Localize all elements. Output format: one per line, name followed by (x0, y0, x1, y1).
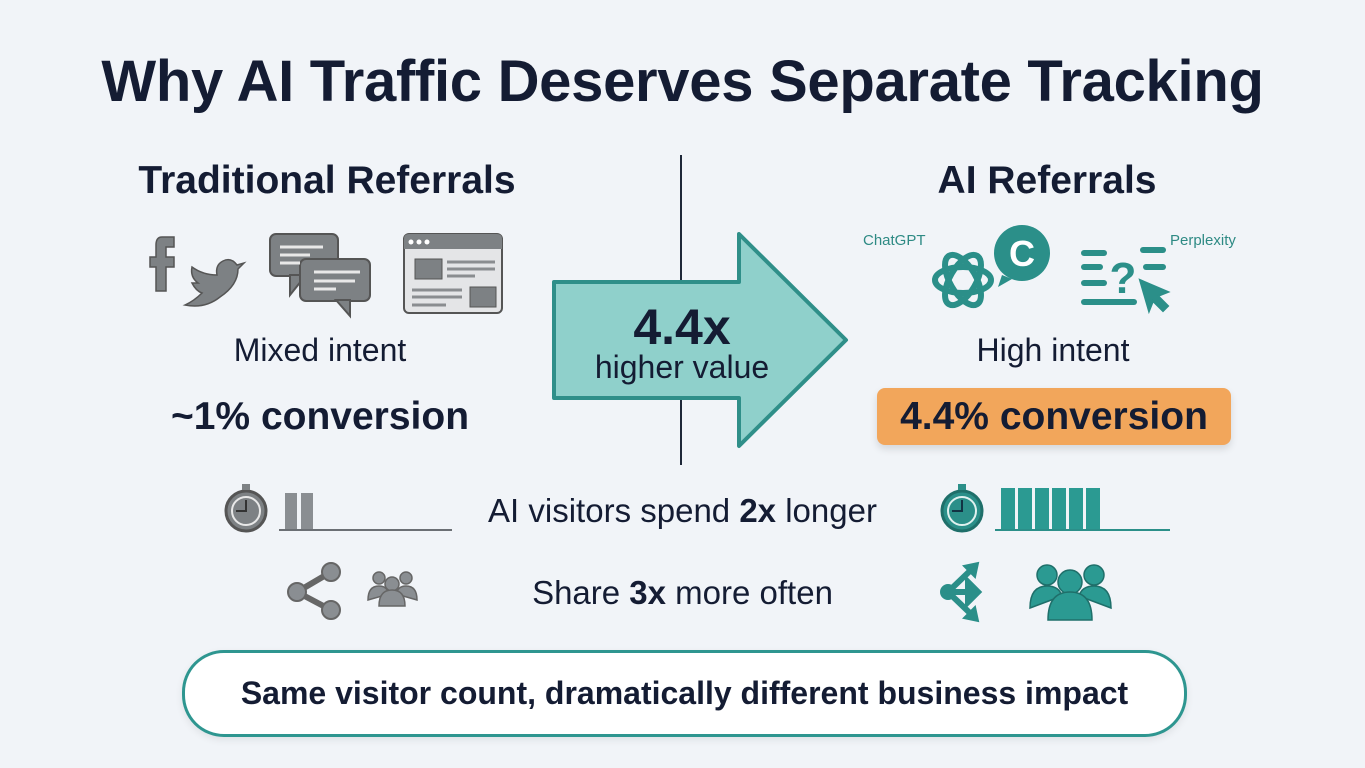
icon: browser (404, 234, 502, 313)
title: Why AI Traffic Deserves Separate Tracking (101, 49, 1264, 114)
icon: split arrows teal (943, 563, 978, 621)
arrow: 4.4x higher value (552, 232, 848, 448)
text: high intent: High intent (976, 332, 1129, 368)
chart: teal bars (995, 488, 1170, 530)
icon: chatgpt logo (935, 249, 991, 311)
row: time on site (224, 484, 1170, 532)
label: ChatGPT: ChatGPT (863, 232, 926, 249)
icon: C bubble: C (1009, 233, 1035, 274)
chart: gray bars (279, 493, 452, 530)
text: share 3x: Share 3x more often (532, 574, 833, 611)
icon: chat bubbles (270, 234, 370, 316)
callout: bottom pill: Same visitor count, dramatically different business impact (241, 675, 1128, 711)
icon: stopwatch gray (226, 484, 266, 531)
heading: AI: AI Referrals (938, 159, 1156, 202)
icons: AI (863, 225, 1236, 314)
stat: 4.4% conversion: 4.4% conversion (900, 395, 1208, 438)
heading: traditional: Traditional Referrals (138, 159, 516, 202)
icon: share gray (288, 563, 340, 619)
text: 2x longer: AI visitors spend 2x longer (488, 492, 877, 529)
icon: people teal (1030, 565, 1111, 620)
icon: people gray (368, 572, 417, 606)
callout: bottom pill (182, 650, 1187, 737)
stat: ~1% conversion: ~1% conversion (171, 395, 469, 438)
icons: traditional (149, 233, 503, 318)
icon: perplexity query: ? (1110, 254, 1136, 303)
icon: stopwatch teal (942, 484, 982, 531)
text: mixed intent: Mixed intent (234, 332, 406, 368)
label: Perplexity: Perplexity (1170, 232, 1236, 249)
icon: twitter (185, 260, 244, 306)
icon: facebook (150, 237, 174, 291)
row: sharing (287, 562, 1112, 622)
arrow: 4.4x higher value: higher value (595, 349, 769, 385)
stat: 4.4% conversion (877, 388, 1231, 445)
icon: C bubble (994, 225, 1050, 287)
arrow: 4.4x higher value: 4.4x (633, 299, 731, 355)
icon: perplexity query (1084, 250, 1168, 311)
